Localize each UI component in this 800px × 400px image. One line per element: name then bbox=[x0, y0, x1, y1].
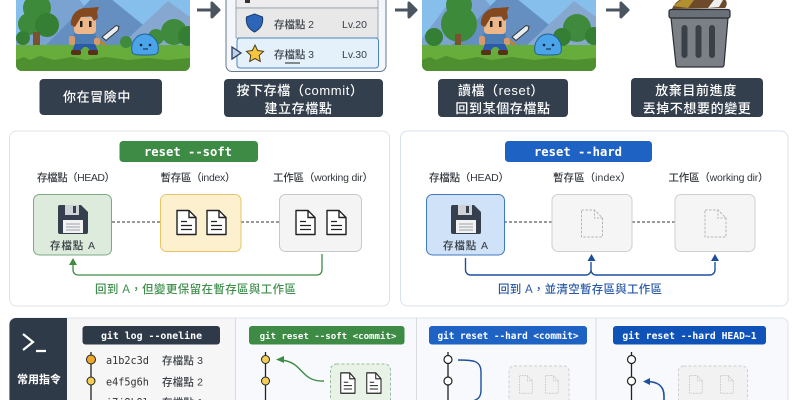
label: working dir: 工作區（working dir） bbox=[273, 171, 373, 184]
icon: trash can bbox=[669, 0, 730, 67]
slot 3 text: 存檔點 3 bbox=[274, 48, 314, 61]
slime bbox=[535, 34, 561, 55]
box: HEAD: 存檔點 A bbox=[443, 239, 488, 252]
column: git reset hard HEAD~1: git reset --hard HEAD~1 bbox=[622, 330, 757, 342]
caption: adventuring bbox=[40, 79, 162, 115]
caption: discard: 放棄目前進度 bbox=[655, 83, 737, 98]
arrow: to save bbox=[197, 3, 219, 17]
column: git log: git log --oneline bbox=[101, 330, 202, 342]
hard badge bbox=[505, 141, 652, 162]
scene: adventuring bbox=[16, 0, 190, 71]
label: index: 暫存區（index） bbox=[160, 171, 236, 184]
sidebar bbox=[10, 318, 67, 400]
column: git log bbox=[82, 326, 220, 400]
caption: discard bbox=[631, 78, 763, 117]
column: git log: 存檔點 2 bbox=[162, 376, 203, 388]
column: git reset hard commit: git reset --hard <commit> bbox=[437, 331, 579, 342]
column: git log: a1b2c3d bbox=[106, 356, 149, 367]
caption: commit: 建立存檔點 bbox=[264, 101, 333, 116]
sidebar title: 常用指令 bbox=[17, 372, 61, 386]
column: git log: e4f5g6h bbox=[106, 378, 149, 388]
icon: star bbox=[247, 45, 264, 61]
label: HEAD: 存檔點（HEAD） bbox=[429, 171, 509, 184]
slot 3 level: Lv.30 bbox=[342, 49, 367, 61]
label: working dir: 工作區（working dir） bbox=[668, 171, 768, 184]
caption: commit: 按下存檔（commit） bbox=[236, 83, 364, 98]
box: HEAD bbox=[426, 194, 504, 255]
column: git reset hard HEAD~1 bbox=[613, 326, 766, 400]
box: index bbox=[160, 194, 241, 252]
caption: reset bbox=[438, 79, 568, 117]
arrow: back to A bbox=[69, 254, 322, 275]
caption: adventuring: 你在冒險中 bbox=[63, 90, 131, 104]
caption: commit bbox=[224, 79, 383, 117]
column: git log: 存檔點 3 bbox=[162, 354, 203, 367]
slot 2 level: Lv.20 bbox=[342, 19, 367, 31]
icon: shield bbox=[246, 14, 263, 32]
caption: discard: 丟掉不想要的變更 bbox=[643, 101, 751, 116]
box: empty index bbox=[552, 194, 632, 252]
label: index: 暫存區（index） bbox=[553, 171, 631, 184]
soft caption: 回到 A，但變更保留在暫存區與工作區 bbox=[95, 282, 296, 296]
box: empty working dir bbox=[675, 194, 755, 252]
soft badge: reset --soft bbox=[144, 145, 232, 159]
slime bbox=[132, 34, 158, 55]
column: git reset soft bbox=[249, 326, 404, 400]
panel: reset hard bbox=[400, 131, 788, 306]
icon: cursor bbox=[232, 47, 241, 59]
box: HEAD: 存檔點 A bbox=[50, 239, 95, 252]
hard badge: reset --hard bbox=[534, 145, 622, 159]
caption: reset: 讀檔（reset） bbox=[458, 83, 544, 98]
scene: reset bbox=[422, 0, 596, 71]
label: HEAD: 存檔點（HEAD） bbox=[37, 171, 115, 184]
arrows: clear index and working dir bbox=[466, 254, 719, 275]
box: HEAD bbox=[34, 194, 112, 255]
hard caption: 回到 A，並清空暫存區與工作區 bbox=[498, 282, 662, 296]
soft badge bbox=[120, 141, 258, 162]
icon: prompt bbox=[23, 334, 46, 351]
panel: common commands bbox=[10, 318, 788, 400]
box: working dir bbox=[280, 194, 362, 252]
caption: reset: 回到某個存檔點 bbox=[455, 101, 551, 116]
panel: save slots bbox=[226, 0, 386, 72]
panel: reset soft bbox=[10, 131, 390, 306]
hero character bbox=[479, 7, 529, 55]
column: git reset hard commit bbox=[429, 326, 587, 400]
slot 2 text: 存檔點 2 bbox=[274, 18, 314, 31]
hero character bbox=[69, 7, 119, 55]
arrow: to reset bbox=[395, 3, 416, 17]
arrow: to discard bbox=[606, 3, 628, 17]
column: git reset soft: git reset --soft <commit> bbox=[260, 331, 397, 342]
